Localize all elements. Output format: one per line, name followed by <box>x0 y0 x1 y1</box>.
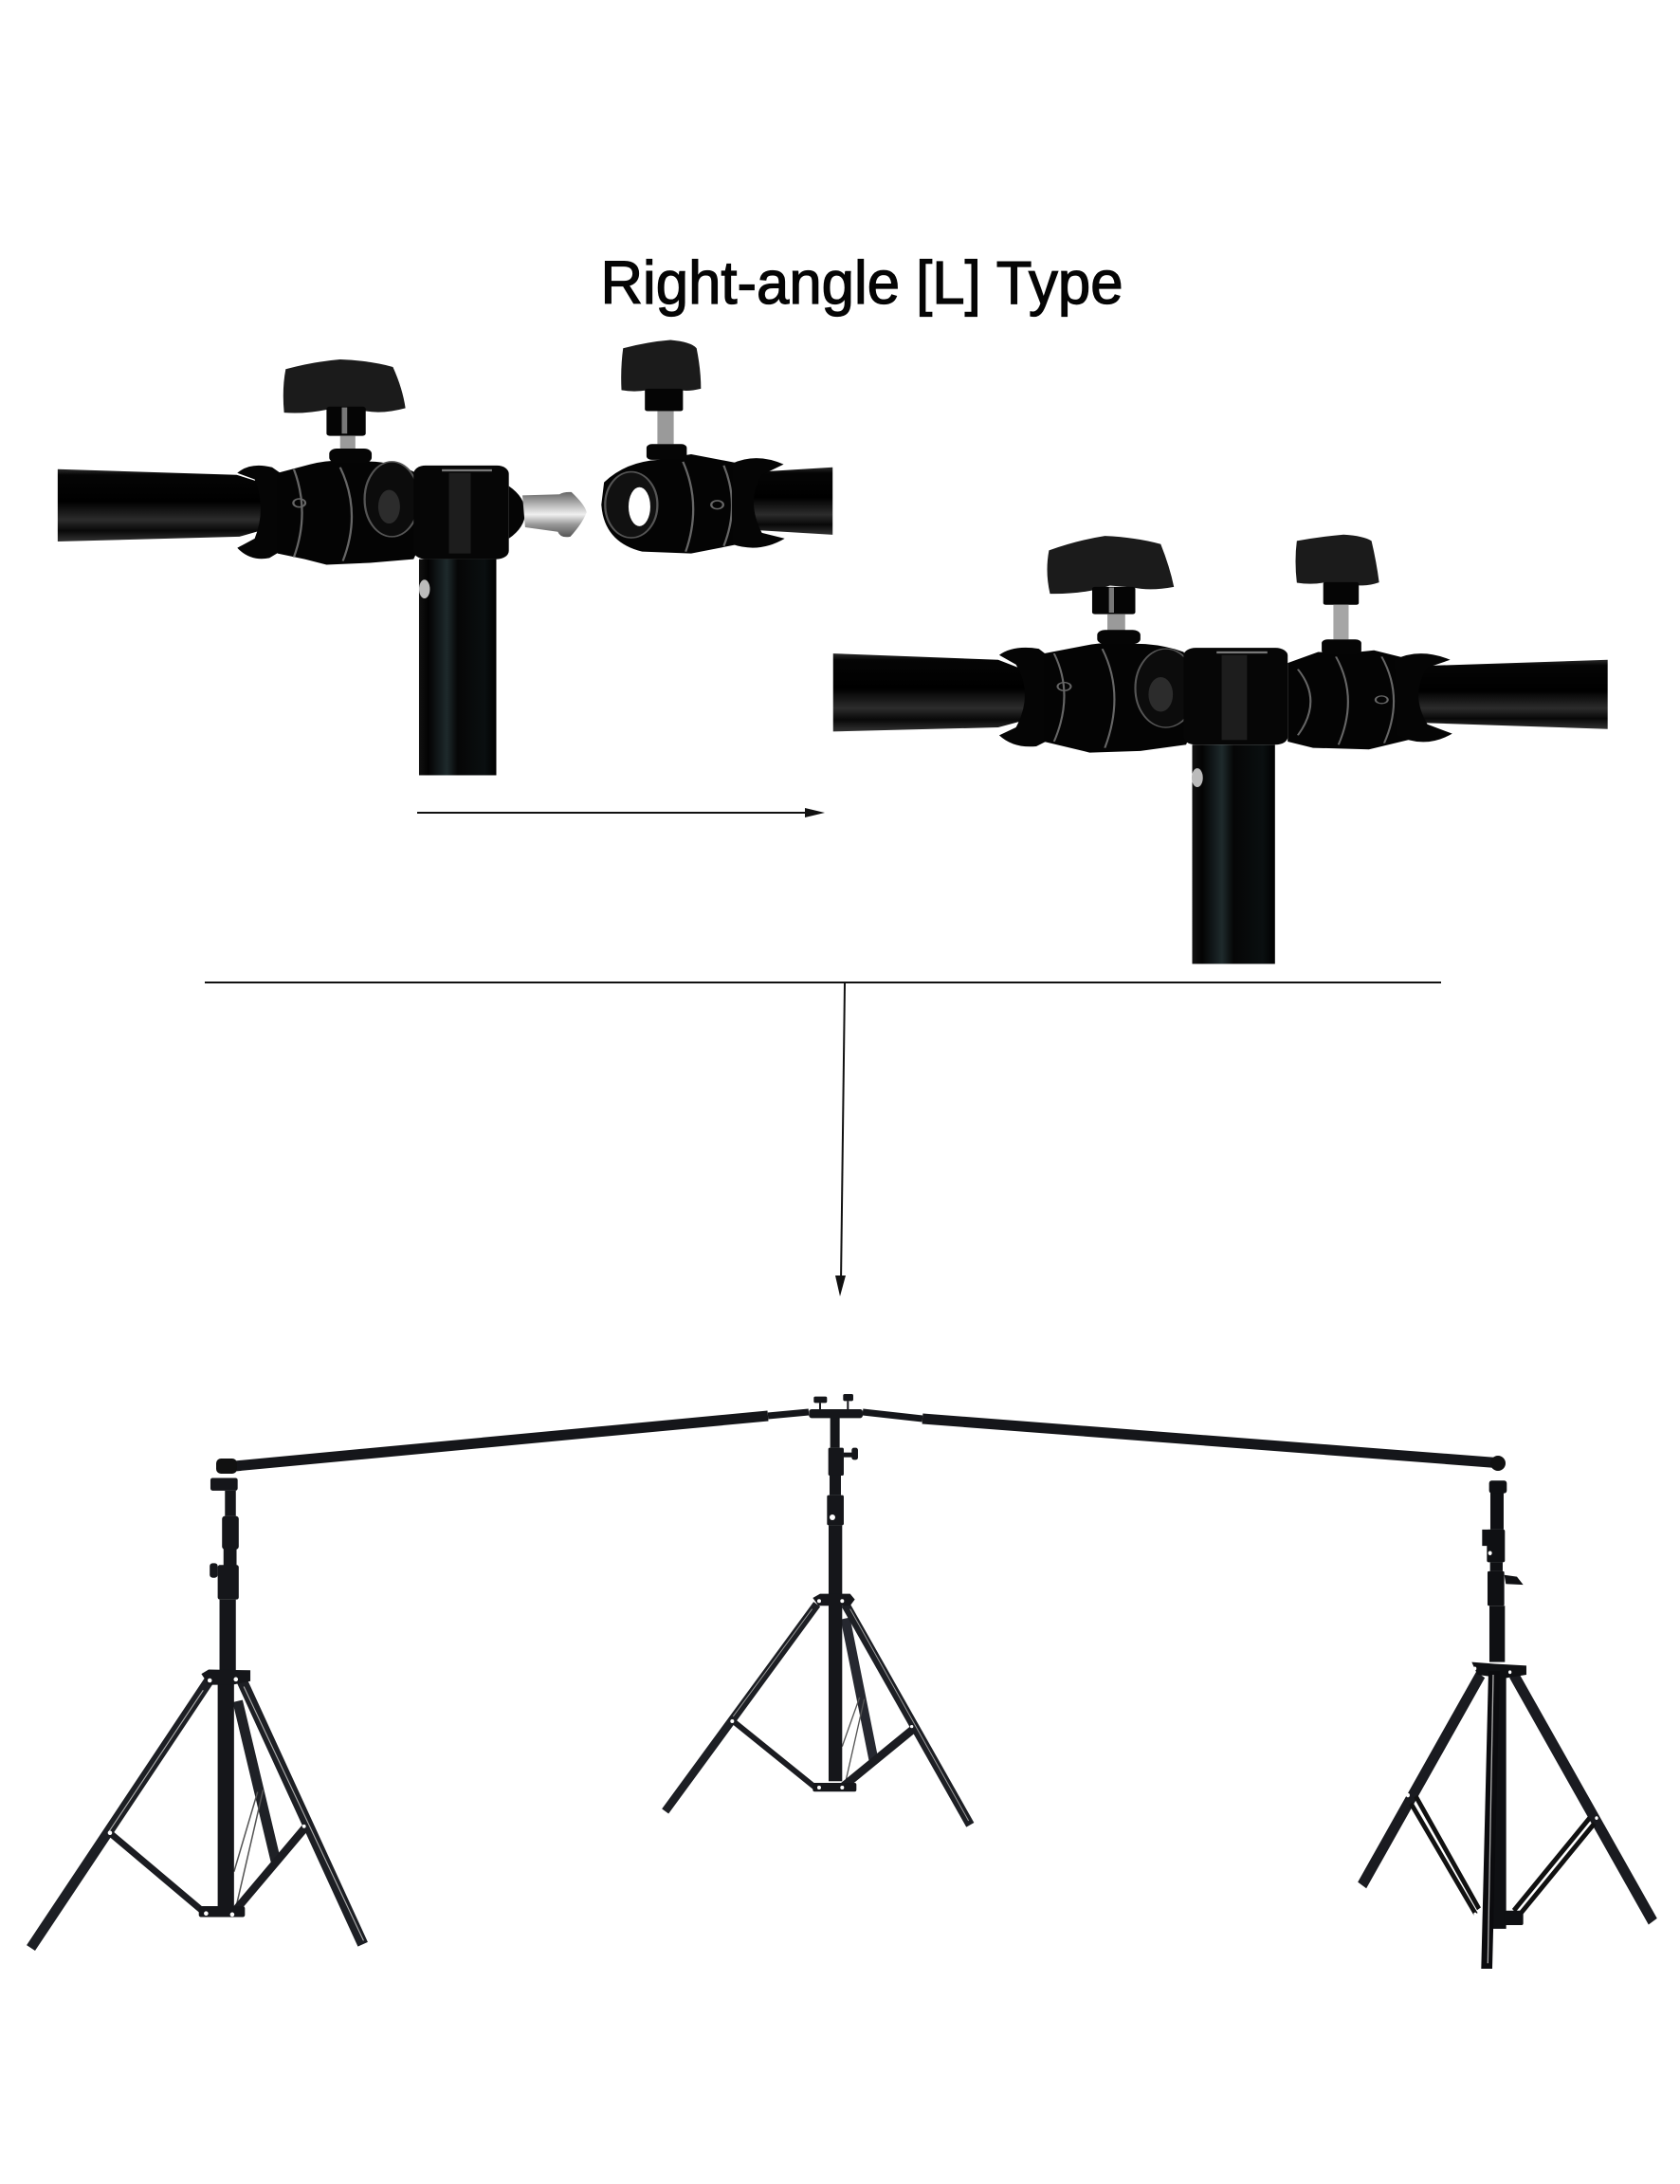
right brace pair <box>1514 1818 1595 1916</box>
left crossbar tube <box>58 469 272 541</box>
pole screw <box>1192 768 1203 787</box>
left knob stem <box>326 407 372 463</box>
leg highlights <box>109 1687 363 1940</box>
pivot dots <box>1406 1551 1598 1916</box>
right clamp highlights <box>1298 656 1394 744</box>
rear leg <box>846 1619 874 1761</box>
right leg <box>1514 1675 1653 1921</box>
side hole <box>1135 649 1196 727</box>
right crossbar <box>863 1412 1506 1471</box>
vertical pole <box>1192 744 1275 964</box>
column <box>1482 1480 1524 1662</box>
front leg highlight <box>1488 1675 1493 1963</box>
right leg <box>846 1605 970 1825</box>
left knob <box>1048 536 1174 594</box>
right clamp highlights <box>683 462 732 552</box>
right leg <box>241 1679 363 1944</box>
left brace pair <box>1411 1796 1479 1915</box>
leg highlights <box>733 1609 969 1821</box>
left clamp body <box>1044 643 1206 753</box>
pole screw <box>419 579 429 598</box>
right crossbar tube <box>1399 660 1608 729</box>
right tripod <box>1362 1480 1653 1969</box>
pivot dots <box>108 1678 306 1917</box>
right knob stem <box>1322 582 1361 654</box>
right flange <box>732 458 785 548</box>
vertical pole <box>419 560 496 775</box>
center tripod <box>666 1394 970 1825</box>
square socket <box>413 466 509 560</box>
left flange <box>237 466 283 559</box>
right crossbar tube <box>740 468 832 535</box>
silver spigot <box>509 486 587 539</box>
left crossbar <box>216 1412 809 1474</box>
left clamp body <box>278 461 435 565</box>
right clamp body <box>1287 651 1415 749</box>
top connector <box>809 1394 863 1418</box>
right knob <box>621 340 701 392</box>
right flange <box>1395 653 1452 742</box>
left leg <box>31 1681 209 1948</box>
right clamp body <box>601 454 748 554</box>
right clamp hole <box>605 472 657 538</box>
right knob stem <box>645 389 686 460</box>
base hub <box>1505 1911 1524 1925</box>
brace wires <box>842 1698 865 1783</box>
left flange <box>999 648 1049 746</box>
left tripod <box>31 1477 363 1948</box>
left leg <box>1362 1675 1481 1885</box>
front leg <box>1481 1671 1500 1969</box>
braces <box>111 1828 304 1912</box>
left clamp highlights <box>1054 649 1114 748</box>
arrow: horizontal <box>417 808 825 817</box>
pivot dots <box>730 1599 913 1789</box>
left crossbar tube <box>833 653 1039 731</box>
panel: separated connector <box>58 340 832 775</box>
title: Right-angle [L] Type <box>601 248 1123 317</box>
top hub <box>1471 1662 1526 1679</box>
base hub <box>813 1783 856 1791</box>
divider line <box>205 982 1441 983</box>
column <box>210 1477 239 1908</box>
rear leg <box>238 1701 276 1861</box>
left knob <box>283 359 406 413</box>
panel: joined connector <box>833 535 1608 964</box>
square socket <box>1183 648 1287 744</box>
brace wires <box>234 1790 263 1908</box>
top hub <box>201 1670 250 1685</box>
column <box>827 1416 858 1781</box>
arrow: vertical <box>835 983 846 1296</box>
panel: assembled backdrop stand <box>31 1394 1653 1969</box>
left knob stem <box>1092 587 1141 644</box>
braces <box>733 1721 913 1788</box>
base hub <box>199 1906 245 1918</box>
clamp highlights <box>293 468 352 561</box>
rear pole <box>1491 1677 1507 1929</box>
clamp side hole <box>365 462 419 537</box>
right knob <box>1296 535 1379 585</box>
top hub <box>813 1594 855 1606</box>
left leg <box>666 1605 817 1811</box>
